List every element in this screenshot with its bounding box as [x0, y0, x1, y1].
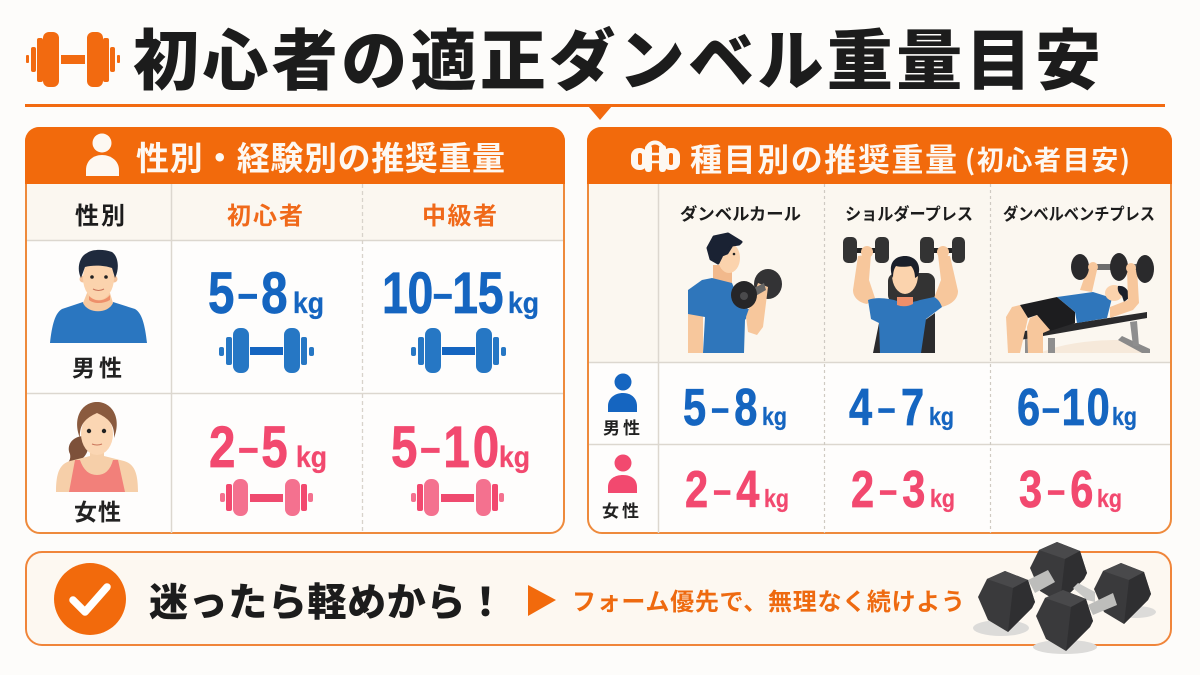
value: curl female: kg — [764, 485, 789, 513]
value: female beginner: kg — [296, 441, 327, 474]
title: 初心者の適正ダンベル重量目安 — [133, 8, 1101, 104]
value: shoulder press female: 2 — [851, 460, 874, 518]
value: curl male: 5 — [683, 378, 706, 436]
value: female beginner: 5 — [261, 416, 288, 480]
panel heading: gender and experience: 性別・経験別の推奨重量 — [136, 132, 505, 180]
value: curl female: 2 — [685, 460, 708, 518]
icon: male person — [608, 374, 637, 412]
value: shoulder press male: kg — [929, 403, 954, 431]
illustration: shoulder press — [843, 237, 965, 353]
value: shoulder press male: 4 — [849, 378, 872, 436]
value: bench press female — [1019, 460, 1122, 518]
value: curl female: – — [713, 467, 731, 512]
value: male beginner: 5 — [208, 262, 234, 326]
value: shoulder press female: 3 — [902, 460, 925, 518]
value: bench press female: 6 — [1070, 460, 1093, 518]
value: male beginner: – — [238, 269, 258, 318]
illustration: bench press — [1006, 253, 1154, 353]
value: shoulder press male: – — [878, 385, 896, 430]
panel: exercises — [587, 127, 1172, 533]
value: female intermediate: – — [420, 423, 440, 472]
illustration: woman — [56, 402, 138, 492]
value: female intermediate: 10 — [443, 416, 499, 480]
value: male beginner: kg — [293, 287, 324, 320]
icon: check mark — [54, 563, 126, 635]
value: male intermediate — [382, 261, 539, 326]
icon: female person — [608, 454, 637, 493]
illustration: man — [50, 250, 147, 343]
label: male: 男性 — [72, 349, 122, 383]
label: male: 男性 — [603, 414, 640, 439]
icon: person in header — [86, 134, 119, 176]
value: female beginner — [209, 416, 327, 480]
column heading: gender: 性別 — [75, 196, 125, 231]
value: bench press male: kg — [1112, 403, 1137, 431]
value: bench press female: – — [1047, 467, 1065, 512]
value: male beginner: 8 — [261, 262, 288, 326]
panel heading: exercises: (初心者目安) — [965, 139, 1130, 178]
value: female beginner: – — [238, 423, 258, 472]
icon: title dumbbell — [26, 32, 120, 87]
value: shoulder press female — [851, 460, 955, 518]
column heading: curl: ダンベルカール — [680, 200, 801, 225]
value: bench press male: – — [1042, 385, 1060, 430]
column heading: shoulder press: ショルダープレス — [845, 200, 973, 225]
column heading: beginner: 初心者 — [227, 196, 303, 231]
panel: gender and experience — [25, 127, 565, 533]
icon: blue dumbbell intermediate — [411, 328, 506, 373]
value: curl female: 4 — [736, 460, 759, 518]
value: male intermediate: 15 — [452, 261, 504, 326]
icon: pink dumbbell intermediate — [411, 479, 504, 516]
callout headline: 迷ったら軽めから！ — [149, 572, 505, 628]
label: female: 女性 — [602, 497, 639, 522]
callout: start light — [26, 542, 1171, 654]
icon: dumbbell in header — [631, 142, 680, 172]
illustration: hex dumbbells — [973, 542, 1156, 654]
column heading: intermediate: 中級者 — [422, 196, 497, 231]
value: bench press female: kg — [1097, 485, 1122, 513]
icon: blue dumbbell beginner — [219, 328, 314, 373]
value: male beginner — [208, 262, 324, 326]
title underline with pointer — [25, 104, 1165, 120]
value: shoulder press female: kg — [930, 485, 955, 513]
value: female intermediate: 5 — [391, 416, 417, 480]
value: curl male: kg — [762, 403, 787, 431]
panel heading: exercises — [690, 135, 1130, 181]
value: shoulder press male: 7 — [901, 378, 924, 436]
arrow — [528, 585, 556, 616]
value: shoulder press male — [849, 378, 954, 436]
column heading: bench press: ダンベルベンチプレス — [1003, 200, 1155, 225]
icon: pink dumbbell beginner — [220, 479, 313, 516]
label: female: 女性 — [74, 493, 121, 527]
value: female intermediate: kg — [499, 441, 530, 474]
panel heading: exercises: 種目別の推奨重量 — [690, 135, 957, 181]
value: bench press male: 6 — [1017, 378, 1040, 436]
value: male intermediate: – — [433, 269, 453, 318]
illustration: dumbbell curl — [688, 234, 782, 353]
value: male intermediate: 10 — [382, 261, 433, 326]
value: curl male: 8 — [734, 378, 757, 436]
value: shoulder press female: – — [879, 467, 897, 512]
value: curl female — [685, 460, 789, 518]
value: male intermediate: kg — [508, 287, 539, 320]
value: bench press male: 10 — [1062, 378, 1110, 436]
value: curl male — [683, 378, 787, 436]
value: female intermediate — [391, 416, 530, 480]
value: curl male: – — [711, 385, 729, 430]
value: female beginner: 2 — [209, 416, 235, 480]
value: bench press female: 3 — [1019, 460, 1042, 518]
value: bench press male — [1017, 378, 1137, 436]
callout message: フォーム優先で、無理なく続けよう — [572, 582, 965, 617]
